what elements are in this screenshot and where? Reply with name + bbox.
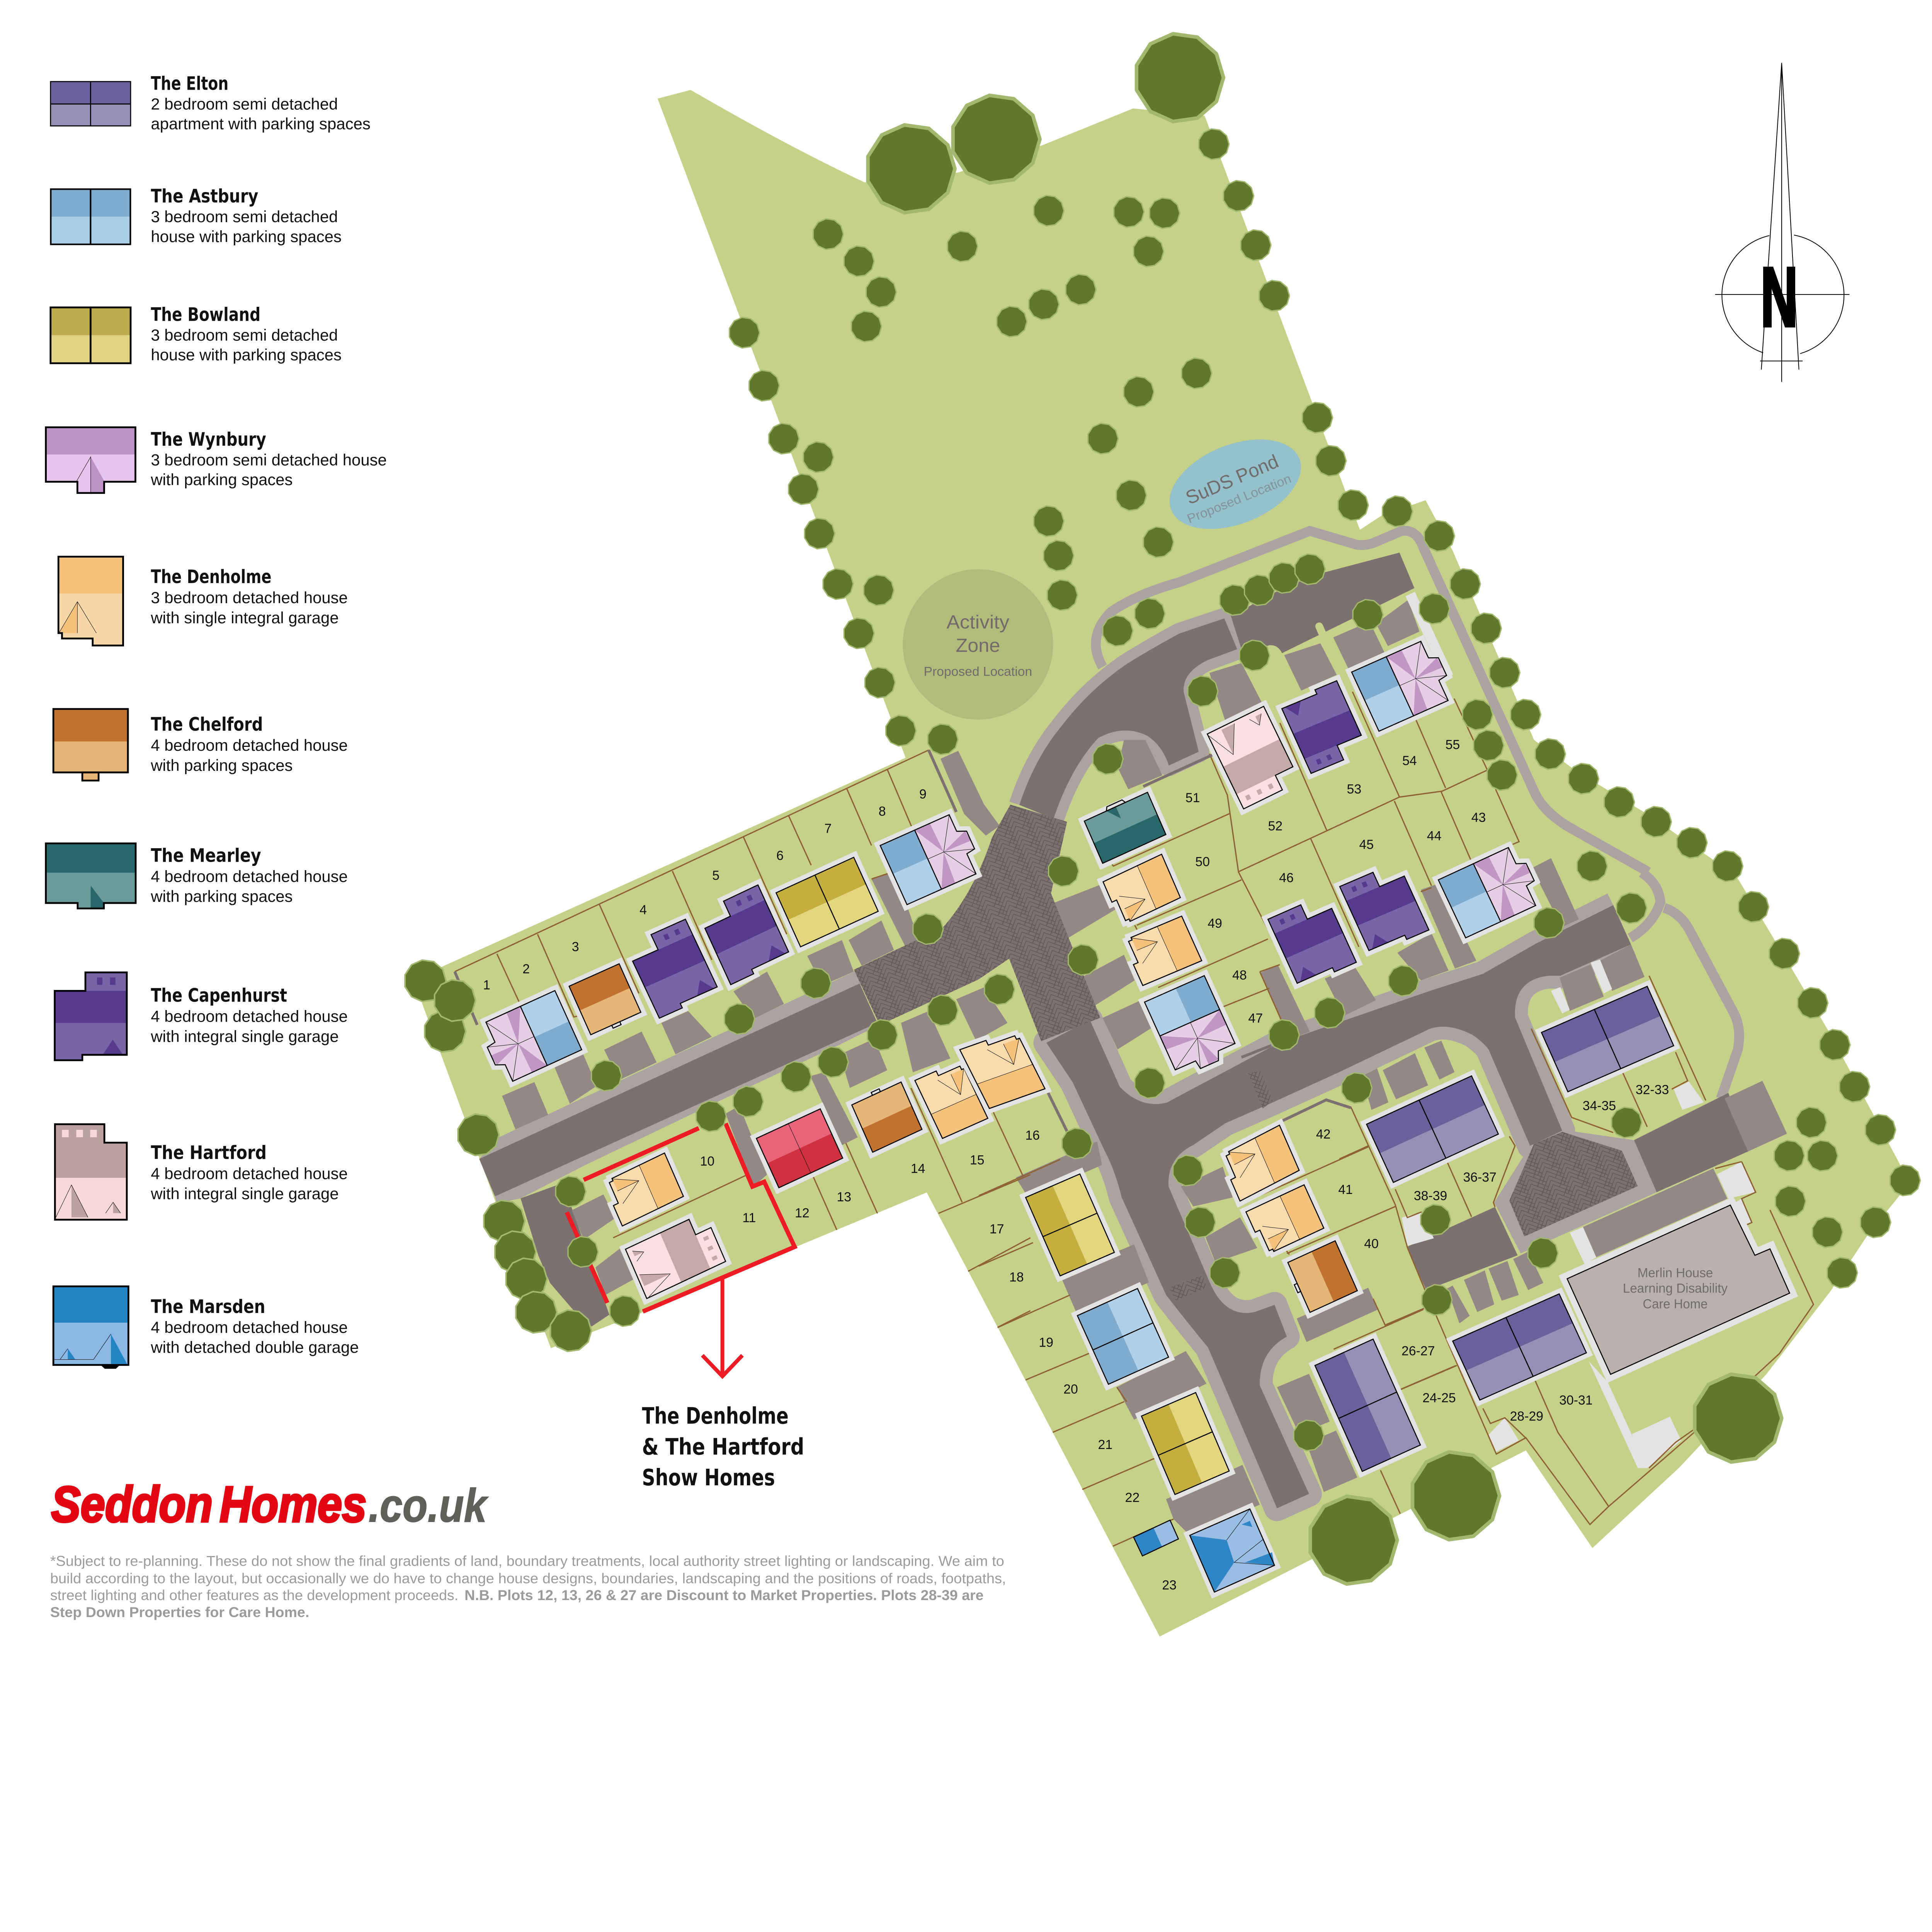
medium trees	[405, 960, 592, 1351]
Merlin House care home	[1567, 1205, 1790, 1374]
plot numbers: 41	[1338, 1182, 1353, 1197]
legend: The Denholme: with single integral garage	[150, 609, 339, 627]
house: plots 21-22 Bowland	[1141, 1393, 1229, 1495]
plot numbers: 47	[1248, 1011, 1263, 1026]
house: plots 28-31 Elton	[1452, 1294, 1587, 1400]
plot numbers: 30-31	[1559, 1393, 1593, 1408]
plot numbers: 53	[1347, 782, 1361, 797]
plot numbers: 12	[795, 1206, 810, 1220]
plot numbers: 6	[776, 849, 784, 863]
plot numbers: 11	[742, 1211, 756, 1225]
site land: green development boundary	[422, 90, 1910, 1636]
houses: north-east cluster	[1083, 638, 1544, 1078]
house: plot 5 Capenhurst	[698, 885, 791, 985]
callout: show homes label: Show Homes	[642, 1464, 775, 1491]
legend: The Marsden: 4 bedroom detached house	[151, 1318, 348, 1337]
legend: The Mearley: The Mearley	[151, 845, 261, 867]
plot numbers: 5	[712, 868, 719, 883]
legend: The Denholme: 3 bedroom detached house	[151, 588, 348, 607]
plot numbers: 36-37	[1463, 1170, 1497, 1185]
plot numbers: 15	[970, 1153, 984, 1167]
driveways	[502, 600, 1787, 1535]
houses: west and north streets	[478, 811, 1045, 1299]
large trees	[868, 34, 1782, 1584]
legend: The Astbury	[51, 186, 342, 245]
SuDS pond	[1156, 422, 1314, 547]
legend: The Capenhurst: with integral single garage	[150, 1027, 339, 1045]
legend: The Wynbury: 3 bedroom semi detached house	[151, 451, 387, 469]
plot numbers: 23	[1162, 1578, 1177, 1592]
legend: The Chelford	[53, 709, 348, 781]
plot numbers: 7	[824, 821, 832, 836]
legend: The Elton: apartment with parking spaces	[151, 114, 371, 133]
plot numbers: 55	[1446, 738, 1460, 752]
legend: The Bowland: The Bowland	[151, 304, 260, 325]
legend: The Mearley	[46, 844, 348, 908]
plot numbers: 42	[1316, 1127, 1331, 1141]
legend: The Capenhurst: 4 bedroom detached house	[151, 1007, 348, 1025]
callout: show homes label: The Denholme	[642, 1403, 789, 1429]
house: plots 17-18 Bowland	[1026, 1174, 1114, 1276]
north arrow	[1715, 63, 1849, 382]
house: plots 6-7 Bowland	[776, 857, 878, 947]
activity zone: Proposed Location	[924, 665, 1032, 679]
legend: The Hartford: with integral single garage	[150, 1184, 339, 1202]
house: plots 12-13 discount market	[756, 1109, 843, 1188]
plot numbers: 4	[639, 903, 647, 917]
plot numbers: 40	[1364, 1236, 1379, 1251]
plot numbers: 49	[1208, 916, 1222, 931]
SuDS pond: Proposed Location	[1185, 471, 1293, 526]
legend: The Denholme	[58, 557, 348, 646]
logo: Seddon Homes: .co.uk	[368, 1479, 488, 1532]
Merlin House care home: Merlin House	[1638, 1265, 1713, 1280]
legend: The Bowland: house with parking spaces	[151, 345, 342, 364]
activity zone: Zone	[956, 635, 1000, 656]
green strip through north-east drive	[1319, 626, 1335, 663]
plot numbers: 18	[1009, 1270, 1024, 1284]
house: plot 40 Chelford	[1285, 1241, 1357, 1314]
legend: The Denholme: The Denholme	[151, 566, 272, 588]
plot numbers: 3	[572, 940, 579, 954]
plot numbers: 48	[1232, 968, 1247, 983]
house: plot 3 Chelford	[569, 964, 642, 1037]
boundary fences	[455, 750, 1351, 1133]
house: plot 42 Denholme	[1220, 1125, 1299, 1201]
legend: The Marsden: with detached double garage	[150, 1338, 359, 1356]
legend: The Bowland: 3 bedroom semi detached	[151, 326, 338, 344]
road: north curve	[1019, 619, 1237, 819]
legend: The Elton	[51, 73, 371, 133]
red show home boundary	[567, 1123, 794, 1311]
block paving: central junction	[854, 804, 1100, 1041]
plot numbers: 2	[522, 962, 530, 976]
plot numbers: 28-29	[1510, 1409, 1543, 1424]
plot numbers: 44	[1427, 829, 1442, 844]
plot numbers	[483, 738, 1669, 1592]
plot numbers: 13	[837, 1190, 851, 1204]
plot numbers: 19	[1039, 1335, 1053, 1350]
house: plot 52 Hartford	[1207, 706, 1300, 809]
plot numbers: 16	[1025, 1128, 1040, 1143]
house: plot 41 Denholme	[1246, 1185, 1324, 1255]
plot numbers: 54	[1402, 753, 1417, 768]
house: plots 54-55 Astbury and Wynbury	[1352, 638, 1456, 731]
footpath around the park	[1096, 531, 1739, 1099]
legend: The Chelford: 4 bedroom detached house	[151, 736, 348, 754]
activity zone	[903, 569, 1053, 719]
plot numbers: 51	[1185, 791, 1200, 805]
plot numbers: 34-35	[1583, 1099, 1616, 1113]
house: plot 11 Hartford show home	[626, 1212, 726, 1299]
house: plot 16 Denholme	[960, 1030, 1045, 1109]
legend: The Astbury: The Astbury	[151, 186, 258, 207]
plot numbers: 9	[919, 787, 927, 801]
callout: show homes label	[642, 1403, 804, 1491]
arrow: pointing to show homes label	[702, 1279, 742, 1376]
plot numbers: 24-25	[1422, 1391, 1456, 1405]
disclaimer text: build according to the layout, but occasionally we do have to change house designs, boundaries, landscaping and the positions of roads, footpaths,	[50, 1571, 1006, 1587]
disclaimer text: street lighting and other features as the development proceeds.	[50, 1587, 458, 1603]
house: plot 45 Capenhurst	[1340, 862, 1429, 955]
houses: southern spine	[1026, 1125, 1420, 1592]
plot numbers: 20	[1063, 1382, 1078, 1396]
plot numbers: 10	[700, 1154, 714, 1169]
light paved patches and paths	[1401, 594, 1755, 1468]
plot numbers: 1	[483, 978, 490, 993]
legend: The Capenhurst	[55, 973, 348, 1060]
plot numbers: 8	[879, 804, 886, 819]
legend: The Mearley: with parking spaces	[150, 887, 293, 905]
house: plot 50 Denholme	[1103, 854, 1180, 925]
legend: The Bowland	[51, 304, 342, 364]
plot numbers: 38-39	[1414, 1189, 1447, 1203]
road: main spine and south-east loop	[1046, 905, 1631, 1508]
legend: The Mearley: 4 bedroom detached house	[151, 867, 348, 885]
footway around east paved square	[1494, 1129, 1656, 1253]
house: plots 8-9 Astbury and Wynbury	[880, 811, 984, 905]
plot numbers: 32-33	[1636, 1083, 1669, 1097]
house: plots 36-39 Elton	[1367, 1076, 1498, 1182]
legend: The Hartford: 4 bedroom detached house	[151, 1164, 348, 1182]
legend: The Hartford: The Hartford	[151, 1142, 267, 1163]
house: plots 19-20 Astbury	[1077, 1289, 1168, 1384]
road: east and west stubs by paved square	[1406, 1093, 1748, 1290]
plot numbers: 45	[1359, 837, 1374, 852]
house: plots 32-35 Elton	[1541, 986, 1673, 1092]
disclaimer text: N.B. Plots 12, 13, 26 & 27 are Discount to Market Properties. Plots 28-39 are	[464, 1587, 984, 1603]
house: plot 49 Denholme	[1123, 916, 1202, 986]
legend: The Chelford: The Chelford	[151, 714, 263, 735]
activity zone: Activity	[947, 611, 1010, 633]
legend: The Wynbury: The Wynbury	[151, 429, 266, 450]
house: plots 43-44 Astbury and Wynbury	[1438, 844, 1544, 938]
plot numbers: 50	[1195, 855, 1210, 869]
house: plots 1-2 Wynbury and Astbury	[478, 991, 582, 1085]
legend: The Elton: The Elton	[151, 73, 228, 94]
disclaimer text: Step Down Properties for Care Home.	[50, 1604, 309, 1620]
house: plot 15 Denholme	[915, 1060, 988, 1138]
Merlin House care home: Learning Disability	[1623, 1281, 1728, 1296]
house: plot 4 Capenhurst	[626, 919, 719, 1018]
plot numbers: 14	[911, 1162, 925, 1176]
house: plot 10 Denholme show home	[604, 1153, 684, 1226]
house: plot 51 Mearley	[1083, 789, 1166, 863]
legend: The Astbury: 3 bedroom semi detached	[151, 207, 338, 226]
house: plots 47-48 Astbury and Wynbury	[1145, 976, 1239, 1078]
legend: The Hartford	[55, 1124, 348, 1220]
plot numbers: 26-27	[1401, 1344, 1435, 1359]
logo: Seddon Homes: Seddon Homes	[51, 1476, 367, 1532]
house: plot 14 Chelford	[850, 1079, 922, 1152]
trees	[556, 129, 1920, 1451]
disclaimer text: *Subject to re-planning. These do not show the final gradients of land, boundary treatments, local authority street lighting or landscaping. We aim to	[50, 1553, 1004, 1569]
road: north-east branch	[1231, 553, 1414, 653]
block paving: east square	[1509, 1132, 1638, 1236]
legend: The Wynbury: with parking spaces	[150, 470, 293, 488]
block paving: rumble strips	[1168, 1071, 1273, 1300]
houses: Elton apartments east	[1367, 986, 1673, 1400]
legend: The Marsden	[53, 1286, 359, 1369]
house: plot 53 Capenhurst	[1280, 681, 1368, 774]
plot numbers: 21	[1098, 1437, 1112, 1452]
north arrow: N	[1761, 250, 1798, 344]
plot numbers: 46	[1279, 871, 1294, 885]
legend: The Marsden: The Marsden	[151, 1296, 265, 1318]
plot numbers: 52	[1268, 819, 1282, 833]
garage: plot 23 Marsden double garage	[1134, 1520, 1179, 1556]
west road with footways	[479, 971, 879, 1327]
house: plot 46 Capenhurst	[1268, 894, 1356, 988]
SuDS pond: SuDS Pond	[1183, 451, 1282, 509]
house: plot 23 Marsden	[1190, 1509, 1274, 1592]
plot numbers: 43	[1471, 810, 1486, 825]
plot boundary lines	[455, 692, 1813, 1546]
house: plots 24-27 Elton	[1315, 1339, 1420, 1471]
legend: The Capenhurst: The Capenhurst	[151, 985, 287, 1006]
legend: The Chelford: with parking spaces	[150, 756, 293, 774]
Merlin House care home: Care Home	[1643, 1297, 1708, 1311]
disclaimer text	[50, 1553, 1006, 1620]
plot numbers: 22	[1125, 1490, 1139, 1505]
callout: show homes label: & The Hartford	[642, 1433, 804, 1460]
legend: The Wynbury	[46, 427, 387, 493]
legend: The Elton: 2 bedroom semi detached	[151, 95, 338, 113]
legend: The Astbury: house with parking spaces	[151, 227, 342, 245]
plot numbers: 17	[990, 1222, 1004, 1236]
